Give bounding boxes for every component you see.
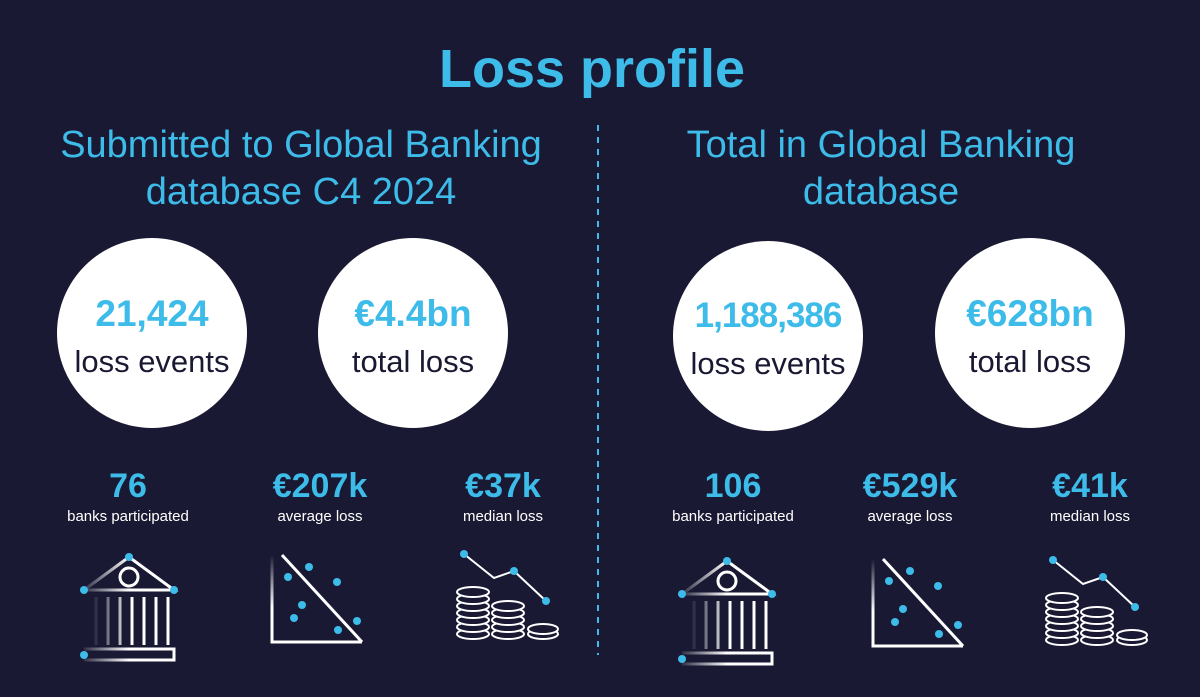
stat: €529k average loss: €529k: [863, 467, 957, 505]
stat: 76 banks participated: banks participated: [67, 508, 189, 525]
circle: 21,424 loss events: 21,424: [95, 293, 209, 334]
heading: right: [687, 124, 1075, 213]
heading: left: Submitted to Global Banking: [60, 124, 542, 166]
stat: €41k median loss: €41k: [1052, 467, 1128, 505]
stat: 106 banks participated: banks participated: [672, 508, 794, 525]
circle: €628bn total loss: total loss: [969, 344, 1091, 379]
stat: €207k average loss: average loss: [277, 508, 363, 525]
stat: €37k median loss: €37k: [465, 467, 541, 505]
heading: right: Total in Global Banking: [687, 124, 1075, 166]
stat: €37k median loss: median loss: [463, 508, 543, 525]
circle: €4.4bn total loss: [318, 238, 508, 428]
stat: €529k average loss: average loss: [867, 508, 953, 525]
circle: €628bn total loss: €628bn: [966, 293, 1094, 334]
stat: €37k median loss: [463, 467, 543, 525]
stat: €207k average loss: €207k: [273, 467, 367, 505]
stat: 76 banks participated: 76: [109, 467, 147, 505]
stat: €207k average loss: [273, 467, 367, 525]
icon: bank left: [80, 553, 178, 660]
circle: 1,188,386 loss events: [673, 241, 863, 431]
circle: 21,424 loss events: loss events: [74, 344, 230, 379]
heading: left: database C4 2024: [146, 171, 456, 213]
stat: €41k median loss: median loss: [1050, 508, 1130, 525]
title: Loss profile: [439, 39, 745, 99]
circle: 21,424 loss events: [57, 238, 247, 428]
icon: scatter triangle right: [873, 559, 963, 646]
icon: bank right: [678, 557, 776, 664]
heading: right: database: [803, 171, 959, 213]
circle: 1,188,386 loss events: loss events: [690, 346, 846, 381]
stat: 106 banks participated: [672, 467, 794, 525]
icon: scatter triangle left: [272, 555, 362, 642]
divider: dashed line: [597, 125, 599, 655]
stat: €41k median loss: [1050, 467, 1130, 525]
stat: €529k average loss: [863, 467, 957, 525]
icon: coins chart left: [457, 550, 558, 639]
icon: coins chart right: [1046, 556, 1147, 645]
stat: 76 banks participated: [67, 467, 189, 525]
stat: 106 banks participated: 106: [705, 467, 761, 505]
circle: 1,188,386 loss events: 1,188,386: [695, 296, 842, 335]
circle: €4.4bn total loss: total loss: [352, 344, 474, 379]
circle: €628bn total loss: [935, 238, 1125, 428]
heading: left: [60, 124, 542, 213]
circle: €4.4bn total loss: €4.4bn: [354, 293, 472, 334]
